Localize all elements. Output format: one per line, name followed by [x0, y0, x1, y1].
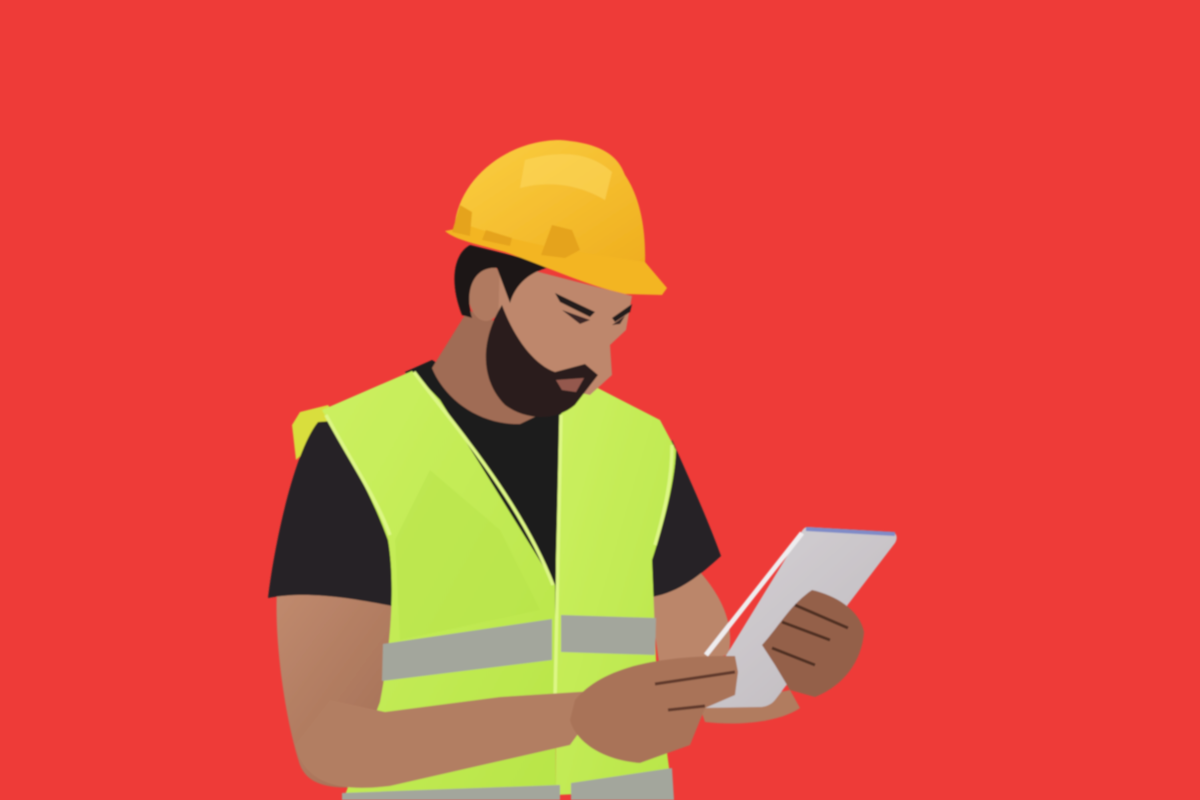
mouth: [556, 378, 584, 392]
left sleeve: [268, 420, 400, 606]
black t-shirt: [268, 360, 721, 620]
brim: [445, 226, 667, 295]
beard: [486, 305, 598, 417]
vest shading: [395, 470, 540, 640]
hard hat: [445, 140, 667, 295]
side vent bumps: [452, 205, 512, 246]
right hand on tablet: [762, 590, 864, 697]
left hand: [570, 656, 738, 763]
vest: [322, 371, 676, 800]
eyebrow and eye: [555, 293, 632, 322]
vest left panel: [322, 371, 556, 795]
left hand finger lines: [655, 672, 735, 710]
dome: [455, 140, 645, 265]
ridge bump: [541, 225, 580, 258]
reflective stripes: [382, 619, 552, 681]
head: [454, 245, 632, 417]
chest: [405, 360, 562, 620]
left upper arm: [277, 590, 420, 788]
vest seams: [326, 372, 672, 700]
neck: [432, 310, 580, 424]
tablet body: [697, 527, 897, 708]
person: [268, 140, 897, 800]
right upper arm: [650, 572, 730, 670]
highlight: [520, 154, 612, 200]
tablet top edge: [806, 529, 895, 534]
face: [498, 262, 632, 395]
vest back collar piece: [292, 405, 340, 460]
ear: [468, 263, 504, 321]
lower forearm over vest: [295, 690, 610, 788]
forearm behind tablet: [700, 690, 800, 723]
vest right panel: [556, 384, 676, 795]
tablet: [697, 527, 897, 708]
hair: [454, 245, 555, 318]
right sleeve: [640, 440, 721, 597]
tablet side edge: [706, 533, 802, 655]
right hand fingers: [772, 605, 848, 665]
